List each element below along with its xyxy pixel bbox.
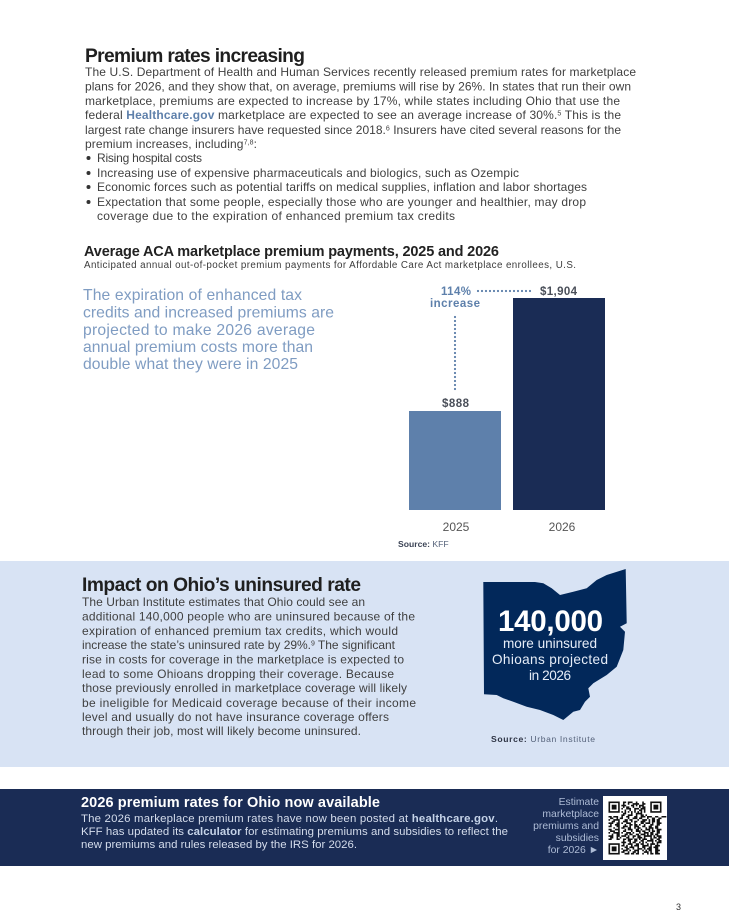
- text block: Ohio paragraph: lead to some Ohioans dropping their coverage. Because: [82, 667, 394, 681]
- text block: premium intro paragraph: Insurers have cited several reasons for the: [390, 123, 621, 137]
- text block: premium intro paragraph: 7,8: [244, 140, 254, 146]
- text block: premium intro paragraph: marketplace, premiums are expected to increase by 17%, while states including Ohio that use the: [85, 94, 620, 108]
- text block: QR prompt: premiums and: [533, 821, 599, 832]
- panel: Ohio uninsured rate: [0, 561, 729, 767]
- text block: premium intro paragraph: [85, 65, 636, 151]
- text block: premium intro paragraph: This is the: [561, 108, 621, 122]
- value label: 2025: $888: [442, 398, 470, 410]
- callout: expiration of tax credits: annual premium costs more than: [83, 339, 313, 356]
- callout: expiration of tax credits: projected to make 2026 average: [83, 322, 315, 339]
- heading: premium rates increasing: Premium rates increasing: [85, 46, 305, 67]
- list: reasons for premium increases: Increasing use of expensive pharmaceuticals and biologics, such as Ozempic: [97, 166, 519, 180]
- statistic caption: more uninsured: [503, 636, 597, 651]
- list: reasons for premium increases: [86, 151, 587, 223]
- text block: QR prompt: subsidies: [556, 833, 599, 844]
- chart subtitle: Anticipated annual out-of-pocket premium payments for Affordable Care Act marketplace enrollees, U.S.: [84, 260, 576, 271]
- text block: footer paragraph: new premiums and rules released by the IRS for 2026.: [81, 839, 357, 851]
- text block: Ohio paragraph: The Urban Institute estimates that Ohio could see an: [82, 595, 365, 609]
- text block: premium intro paragraph: 5: [557, 110, 561, 118]
- axis label: 2025: 2025: [443, 520, 470, 534]
- statistic caption: Ohioans projected: [492, 652, 608, 667]
- callout: expiration of tax credits: The expiration of enhanced tax: [83, 287, 302, 304]
- icon: Ohio map with statistic: [483, 569, 627, 720]
- text block: Ohio paragraph: 9: [311, 640, 315, 648]
- text block: Ohio paragraph: increase the state’s uninsured rate by 29%.: [82, 638, 311, 652]
- text block: Ohio paragraph: level and usually do not have insurance coverage offers: [82, 710, 389, 724]
- statistic caption: in 2026: [529, 668, 571, 683]
- source: Urban Institute: Source: Urban Institute: [491, 734, 595, 744]
- annotation: 114% increase: increase: [430, 298, 480, 310]
- text block: premium intro paragraph: :: [254, 137, 257, 151]
- text block: Ohio paragraph: rise in costs for coverage in the marketplace is expected to: [82, 652, 404, 666]
- text block: footer paragraph: KFF has updated its calculator for estimating premiums and subsidies to reflect the: [81, 826, 508, 838]
- text block: Ohio paragraph: additional 140,000 people who are uninsured because of the: [82, 610, 415, 624]
- text block: Ohio paragraph: [82, 595, 416, 738]
- text block: QR prompt: Estimate: [559, 797, 599, 808]
- text block: QR prompt: [533, 797, 599, 856]
- list: reasons for premium increases: coverage due to the expiration of enhanced premium tax credits: [97, 209, 455, 223]
- text block: premium intro paragraph: 6: [386, 126, 390, 132]
- value label: 2026: $1,904: [540, 286, 578, 298]
- annotation: 114% increase: 114%: [441, 286, 471, 298]
- text block: footer paragraph: [81, 813, 508, 851]
- panel: 2026 premium rates footer: [0, 789, 729, 866]
- heading: impact on Ohio's uninsured rate: Impact on Ohio’s uninsured rate: [82, 575, 361, 596]
- text block: premium intro paragraph: plans for 2026, and they show that, on average, premiums will rise by 26%. In states that run their own: [85, 80, 631, 94]
- heading: chart title: Average ACA marketplace premium payments, 2025 and 2026: [84, 244, 499, 260]
- statistic: 140,000: 140,000: [498, 605, 603, 638]
- bar chart: average premium payments: [409, 286, 605, 534]
- list: reasons for premium increases: Expectation that some people, especially those who are younger and healthier, may drop: [97, 195, 586, 209]
- bar: 2025: [409, 411, 501, 510]
- arrow: dotted connector: [455, 291, 531, 392]
- text block: footer paragraph: The 2026 markeplace premium rates have now been posted at healthcare.gov.: [81, 813, 498, 825]
- statistic caption: [492, 636, 608, 683]
- text block: Ohio paragraph: The significant: [315, 638, 396, 652]
- text block: premium intro paragraph: The U.S. Department of Health and Human Services recently released premium rates for marketplace: [85, 65, 636, 79]
- list: reasons for premium increases: Economic forces such as potential tariffs on medical supplies, inflation and labor shortages: [97, 180, 587, 194]
- list: reasons for premium increases: Rising hospital costs: [97, 151, 202, 165]
- icon: QR code: [603, 796, 667, 860]
- heading: 2026 premium rates for Ohio: 2026 premium rates for Ohio now available: [81, 795, 380, 811]
- callout: expiration of tax credits: double what they were in 2025: [83, 356, 298, 373]
- text block: Ohio paragraph: be ineligible for Medicaid coverage because of their income: [82, 696, 416, 710]
- annotation: 114% increase: [430, 286, 480, 310]
- text block: premium intro paragraph: premium increases, including: [85, 137, 243, 151]
- callout: expiration of tax credits: [83, 287, 334, 373]
- source: KFF: Source: KFF: [398, 539, 449, 549]
- callout: expiration of tax credits: credits and increased premiums are: [83, 304, 334, 322]
- text block: QR prompt: for 2026 ►: [548, 845, 599, 856]
- text block: QR prompt: marketplace: [542, 809, 599, 820]
- bar: 2026: [513, 298, 605, 510]
- text block: Ohio paragraph: those previously enrolled in marketplace coverage will likely: [82, 681, 407, 695]
- text block: Ohio paragraph: expiration of enhanced premium tax credits, which would: [82, 624, 398, 638]
- text block: premium intro paragraph: federal Healthcare.gov marketplace are expected to see an average increase of 30%.: [85, 108, 557, 122]
- text block: premium intro paragraph: largest rate change insurers have requested since 2018.: [85, 123, 386, 137]
- axis label: 2026: 2026: [549, 520, 576, 534]
- text block: Ohio paragraph: through their job, most will likely become uninsured.: [82, 724, 361, 738]
